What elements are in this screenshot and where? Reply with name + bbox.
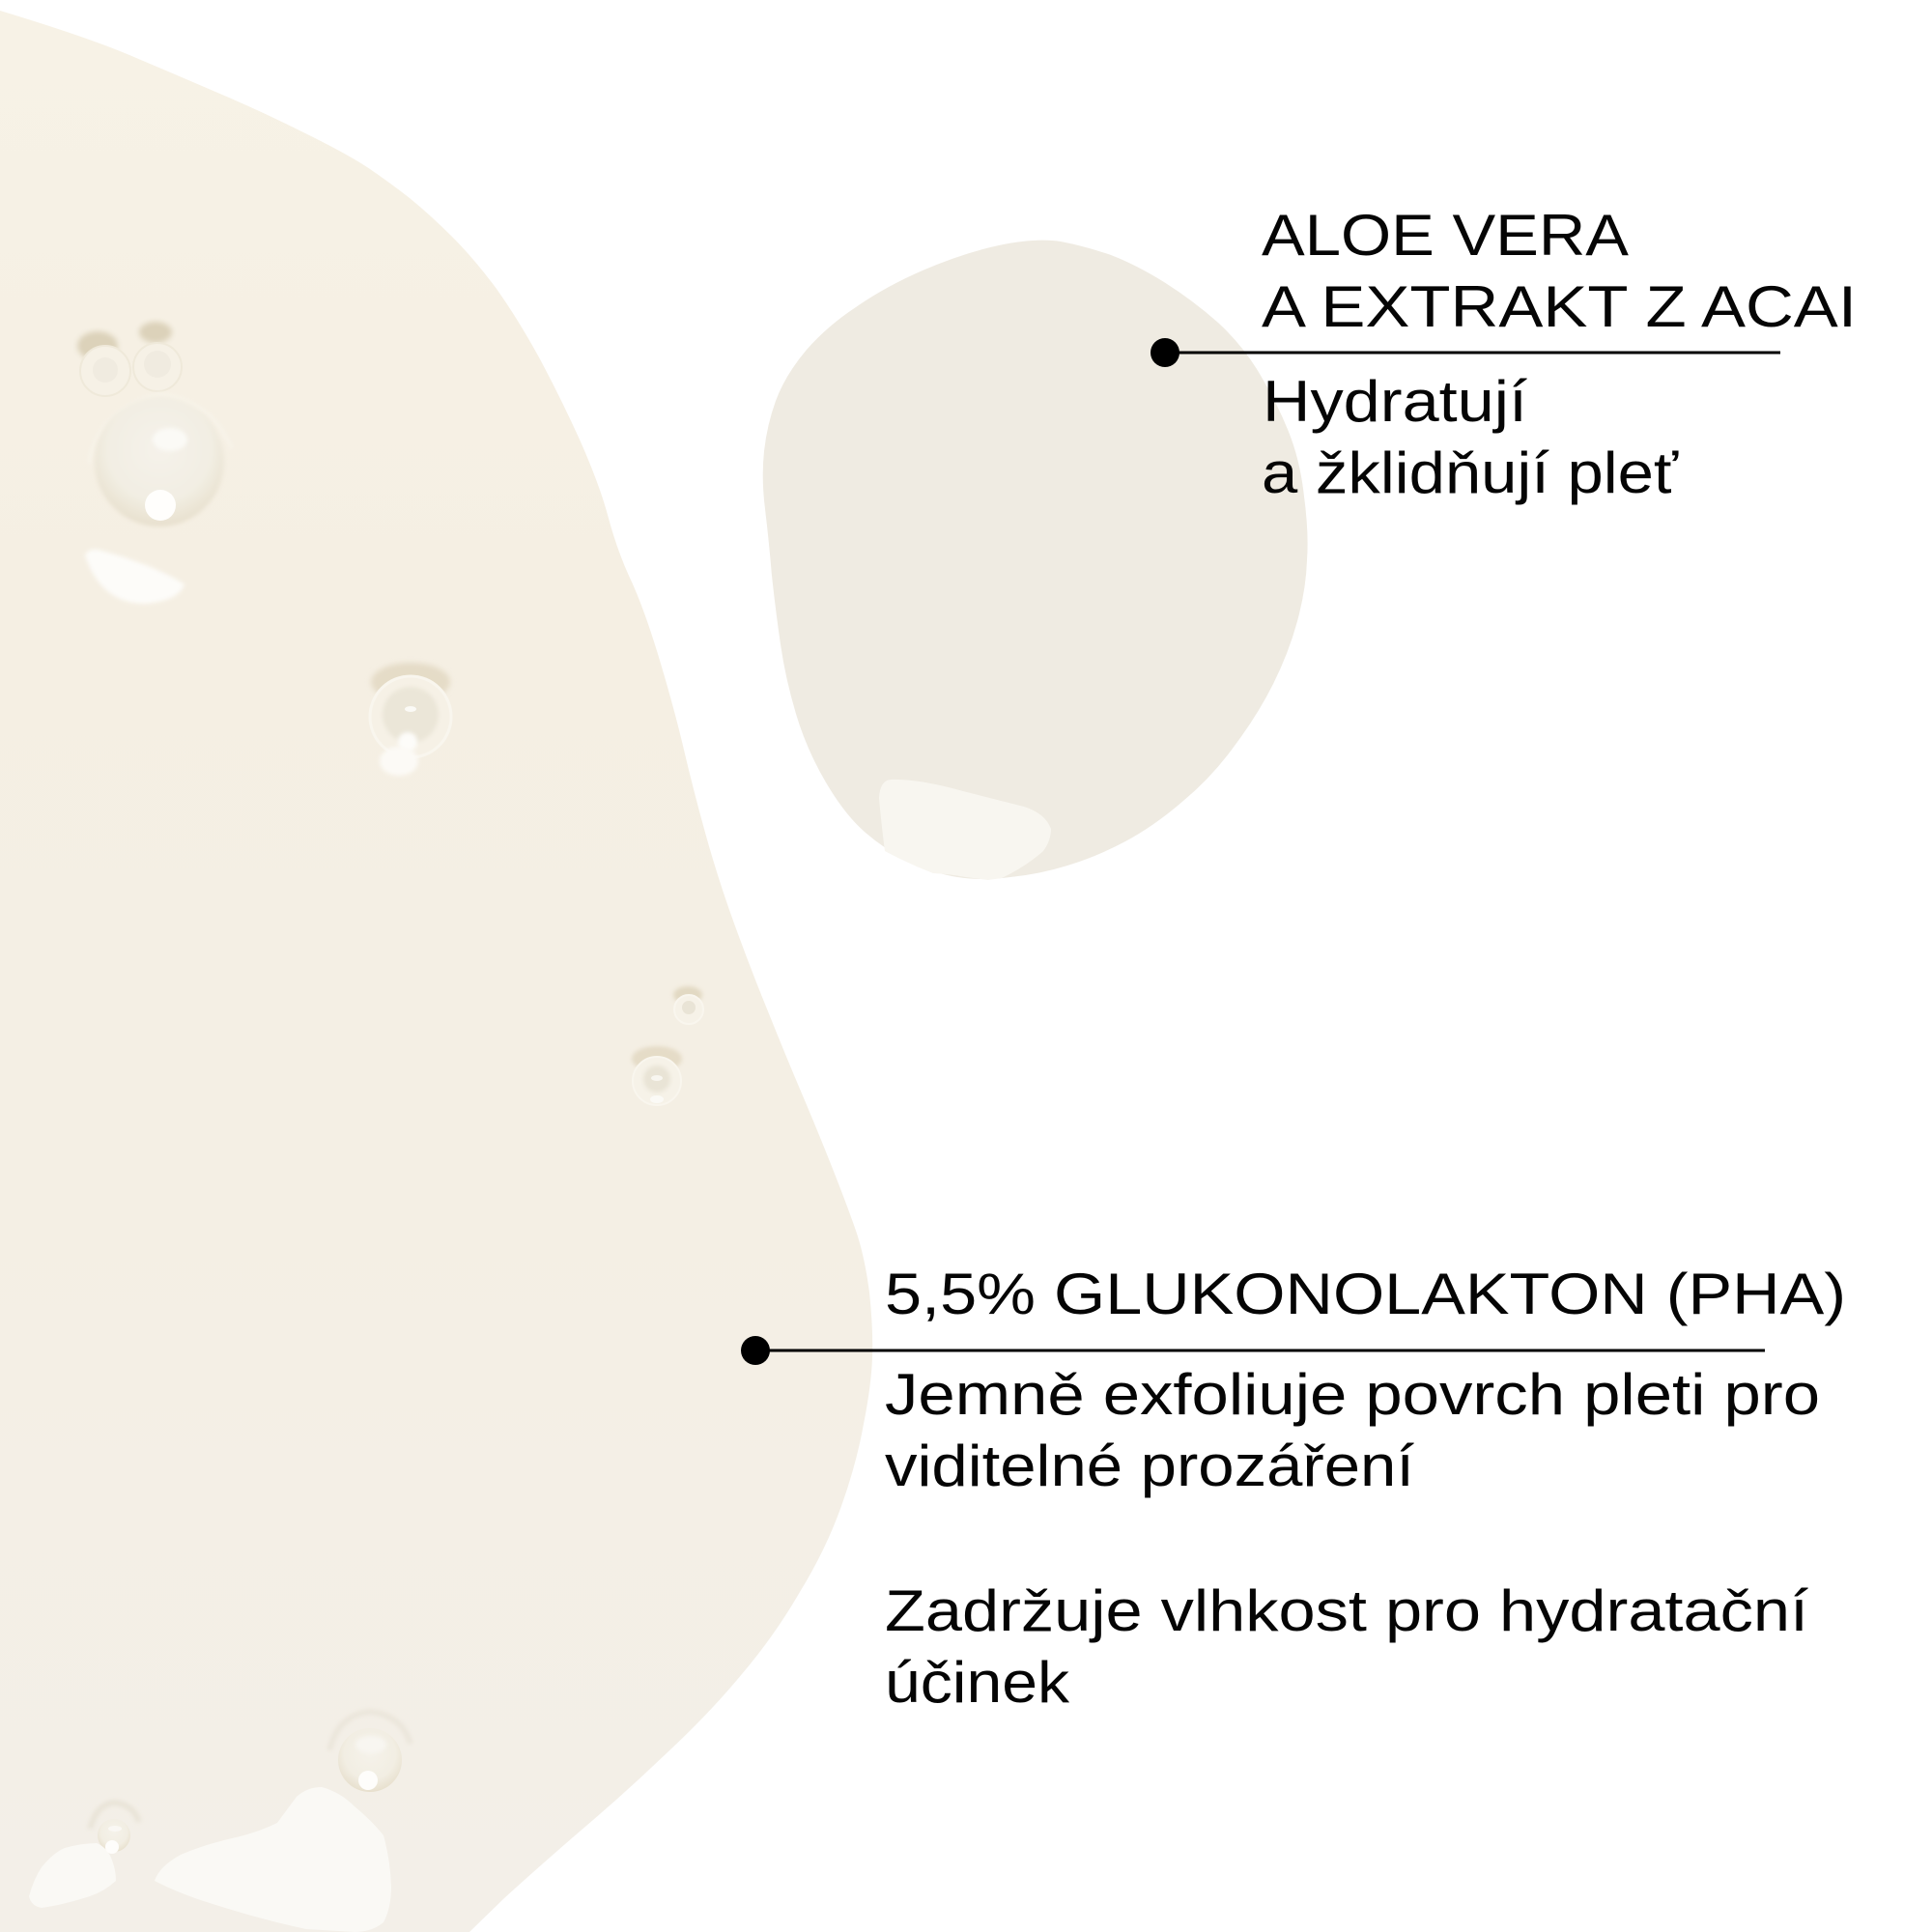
body text: exfoliation line two: viditelné prozáření bbox=[885, 1434, 1414, 1498]
callout heading: aloe vera: ALOE VERA bbox=[1262, 203, 1629, 268]
callout body text line two: a žklidňují pleť bbox=[1262, 440, 1679, 505]
callout heading: acai extract: A EXTRAKT Z ACAI bbox=[1262, 274, 1857, 339]
small round gel drop bbox=[763, 241, 1308, 880]
bubble: bottom left bbox=[90, 1803, 139, 1852]
bubble cluster: top left bbox=[77, 322, 232, 526]
white reflection: bottom small bbox=[29, 1843, 116, 1908]
bubble: small right bbox=[673, 986, 703, 1024]
callout dot bbox=[741, 1336, 770, 1365]
callout: gluconolactone bbox=[741, 1262, 1846, 1715]
white reflection in drop bbox=[879, 780, 1051, 880]
white reflection: bottom large bbox=[155, 1787, 391, 1932]
body text: hydration line one: Zadržuje vlhkost pro hydratační bbox=[885, 1578, 1808, 1643]
callout leader line bbox=[1165, 352, 1780, 354]
callout leader line bbox=[755, 1349, 1765, 1352]
callout heading: PHA: 5,5% GLUKONOLAKTON (PHA) bbox=[885, 1262, 1846, 1326]
body text: hydration line two: účinek bbox=[885, 1650, 1070, 1715]
bubble highlight: bottom left dot bbox=[105, 1840, 119, 1854]
callout: aloe vera and acai bbox=[1151, 203, 1857, 505]
bubble: bottom right bbox=[329, 1712, 411, 1792]
callout dot bbox=[1151, 338, 1179, 367]
white reflection: top left crescent bbox=[85, 550, 185, 604]
bubble: medium right bbox=[632, 1046, 682, 1105]
bubble: upper middle bbox=[370, 663, 451, 776]
body text: exfoliation line one: Jemně exfoliuje povrch pleti pro bbox=[885, 1362, 1820, 1427]
large cream gel swatch bbox=[0, 11, 872, 1932]
callout body text line one: Hydratují bbox=[1263, 369, 1527, 434]
